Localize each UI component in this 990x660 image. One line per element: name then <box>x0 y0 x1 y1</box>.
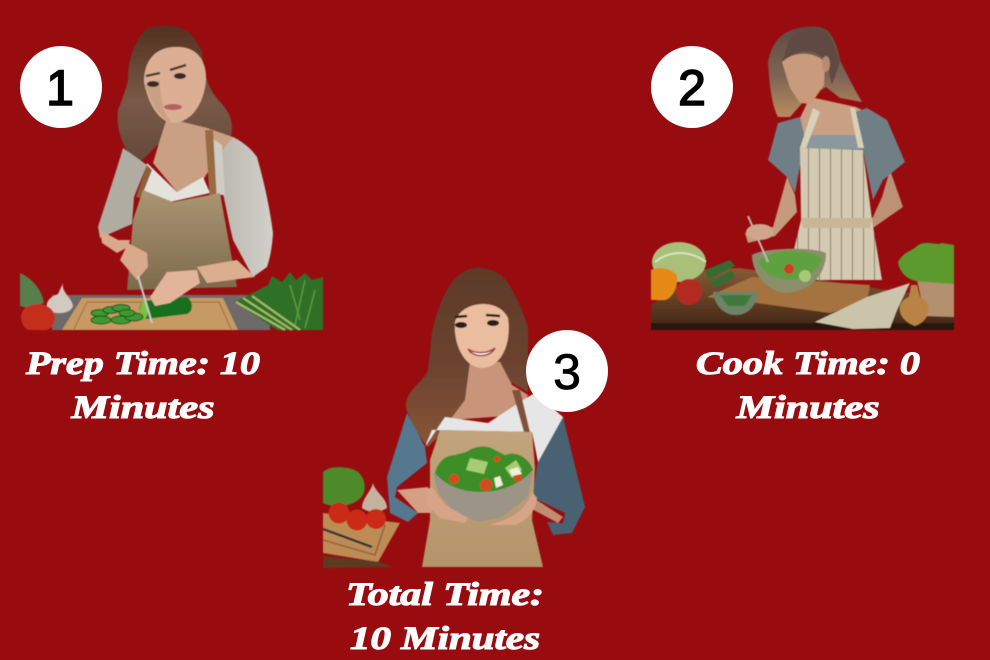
right forearm <box>197 260 255 283</box>
board <box>707 277 870 313</box>
hands <box>425 487 468 523</box>
illustration: woman slicing cucumber <box>20 26 323 330</box>
left sleeve <box>387 413 427 522</box>
badge 1 <box>20 46 102 128</box>
white top <box>143 163 210 202</box>
bowl <box>433 473 533 522</box>
table <box>651 268 954 330</box>
knife <box>138 276 152 323</box>
eyes <box>455 322 467 328</box>
hair <box>118 26 232 161</box>
right arm <box>827 170 903 267</box>
towel <box>815 283 910 329</box>
eyes <box>147 81 159 87</box>
pot <box>917 280 954 317</box>
small bowl <box>713 292 758 315</box>
badge 1: 1 <box>46 60 74 116</box>
salad <box>435 446 533 492</box>
left hand <box>120 243 148 280</box>
lettuce <box>898 243 954 284</box>
caption: cook time <box>696 346 920 426</box>
face <box>455 304 509 368</box>
large salad bowl <box>752 249 826 293</box>
right sleeve <box>215 137 273 277</box>
neck and chest <box>153 118 233 192</box>
tomato <box>21 304 55 330</box>
caption: prep time <box>25 346 260 426</box>
apron strap <box>512 390 530 432</box>
caption: cook time: Minutes <box>735 390 880 426</box>
garlic <box>47 283 73 313</box>
right forearm <box>530 497 563 523</box>
broccoli <box>323 467 365 506</box>
apron <box>422 430 543 567</box>
badge 2: 2 <box>678 60 706 116</box>
right hand <box>150 270 200 306</box>
cutting board <box>62 298 238 330</box>
board stack <box>323 513 400 562</box>
left sleeve <box>98 148 147 238</box>
face <box>782 54 825 104</box>
hair <box>768 27 862 117</box>
caption: total time: 10 Minutes <box>350 621 540 657</box>
left arm <box>745 177 797 243</box>
leaf <box>20 273 44 308</box>
onion <box>900 285 928 326</box>
hair <box>406 268 528 447</box>
hair top <box>782 28 840 85</box>
face <box>144 47 206 123</box>
cucumber slices <box>91 304 143 324</box>
ear <box>822 56 830 72</box>
neck and chest <box>800 97 866 140</box>
tomato <box>676 279 702 305</box>
caption: prep time: Minutes <box>70 390 214 426</box>
apron straps <box>205 130 217 202</box>
neck and chest <box>450 362 528 420</box>
white shirt <box>425 393 563 462</box>
left forearm <box>100 230 130 253</box>
badge 3: 3 <box>553 344 581 400</box>
shirt <box>768 108 905 200</box>
illustration: woman holding salad bowl <box>323 268 585 568</box>
caption: total time: Total Time: <box>346 577 544 613</box>
cucumbers <box>705 260 735 288</box>
caption: total time <box>346 577 544 657</box>
tomatoes <box>328 502 350 524</box>
apron straps <box>800 108 864 148</box>
badge 3 <box>526 330 608 412</box>
smile <box>468 348 495 356</box>
cucumber <box>140 297 192 319</box>
counter <box>52 295 270 330</box>
knife <box>323 529 372 547</box>
caption: cook time: Cook Time: 0 <box>696 346 920 382</box>
illustration: woman tossing salad <box>651 27 954 330</box>
cabbage <box>652 242 706 282</box>
caption: prep time: Prep Time: 10 <box>25 346 260 382</box>
right sleeve <box>532 417 585 535</box>
garlic <box>362 483 387 512</box>
apron <box>787 148 882 280</box>
bell pepper <box>651 268 677 300</box>
greens on counter <box>235 272 323 330</box>
hand <box>746 224 774 240</box>
left forearm <box>397 487 432 513</box>
apron <box>127 190 237 290</box>
spoon <box>748 216 768 262</box>
lips <box>164 104 182 110</box>
badge 2 <box>651 46 733 128</box>
